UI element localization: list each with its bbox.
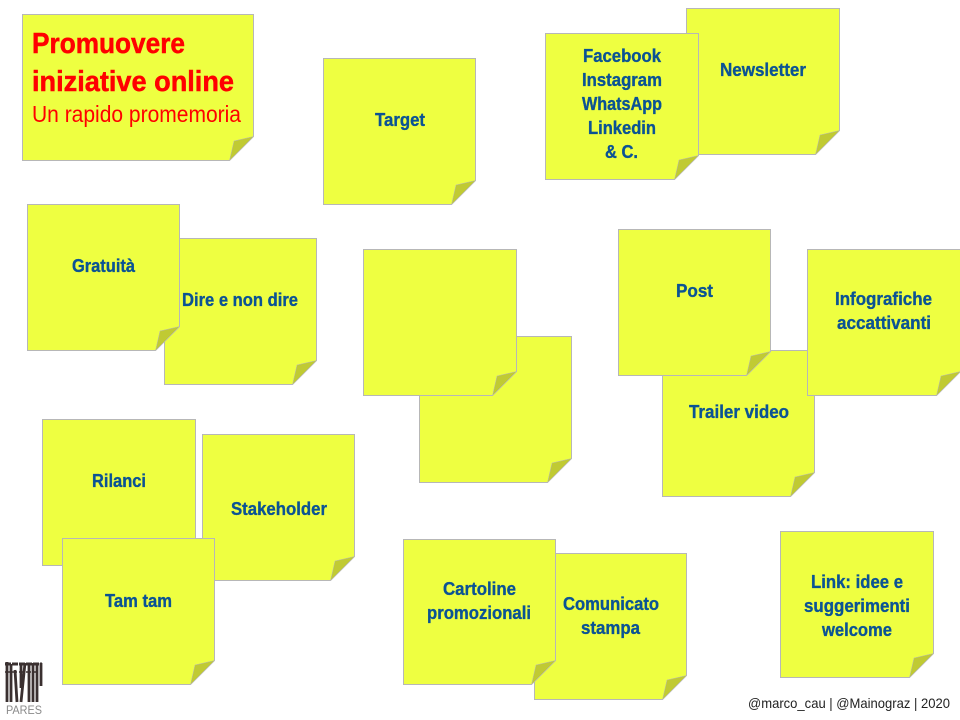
empty note front	[364, 250, 516, 396]
note: Gratuità: Gratuità	[72, 255, 136, 276]
heading: Promuovere	[32, 28, 185, 60]
credits: @marco_cau | @Mainograz | 2020	[748, 695, 950, 711]
note: social networks: Linkedin	[588, 117, 656, 138]
note: Stakeholder	[202, 434, 354, 580]
title note	[22, 14, 254, 160]
note: Cartoline promozionali	[404, 540, 556, 684]
note: social networks: & C.	[605, 141, 638, 162]
note: Post: Post	[676, 280, 713, 301]
empty note back	[420, 336, 572, 482]
subtitle: Un rapido promemoria	[32, 101, 241, 127]
note: Newsletter	[686, 8, 840, 154]
note: social networks: WhatsApp	[582, 93, 662, 114]
note: Target: Target	[375, 109, 425, 130]
note: Comunicato stampa: stampa	[581, 617, 641, 638]
note: Cartoline promozionali: Cartoline	[443, 578, 516, 599]
note: Target	[324, 58, 476, 204]
note: Dire e non dire	[164, 238, 316, 384]
note: Stakeholder: Stakeholder	[231, 498, 327, 519]
note: Tam tam	[62, 538, 214, 684]
note: Newsletter: Newsletter	[720, 59, 806, 80]
note: Trailer video	[662, 350, 814, 496]
note: Infografiche accattivanti: Infografiche	[835, 288, 932, 309]
note: Comunicato stampa	[534, 554, 686, 700]
heading line 2: iniziative online	[32, 66, 234, 98]
logo: PARES	[5, 662, 42, 717]
note: Cartoline promozionali: promozionali	[427, 602, 531, 623]
note: Trailer video: Trailer video	[689, 401, 789, 422]
note: social networks	[546, 34, 698, 180]
note: Link idee e suggerimenti	[780, 532, 934, 678]
note: Infografiche accattivanti	[808, 250, 960, 396]
note: Link idee e suggerimenti: Link: idee e	[811, 571, 903, 592]
note: Comunicato stampa: Comunicato	[563, 593, 659, 614]
logo wordmark: PARES	[6, 703, 42, 717]
note: Infografiche accattivanti: accattivanti	[837, 312, 931, 333]
note: Rilanci: Rilanci	[92, 470, 146, 491]
note: Link idee e suggerimenti: suggerimenti	[804, 595, 910, 616]
note: Tam tam: Tam tam	[105, 590, 172, 611]
note: Dire e non dire: Dire e non dire	[182, 289, 298, 310]
note: Link idee e suggerimenti: welcome	[821, 619, 892, 640]
note: Gratuità	[28, 204, 180, 350]
note: Post	[618, 230, 770, 376]
note: social networks: Instagram	[582, 69, 662, 90]
note: social networks: Facebook	[583, 45, 662, 66]
note: Rilanci	[42, 420, 196, 566]
